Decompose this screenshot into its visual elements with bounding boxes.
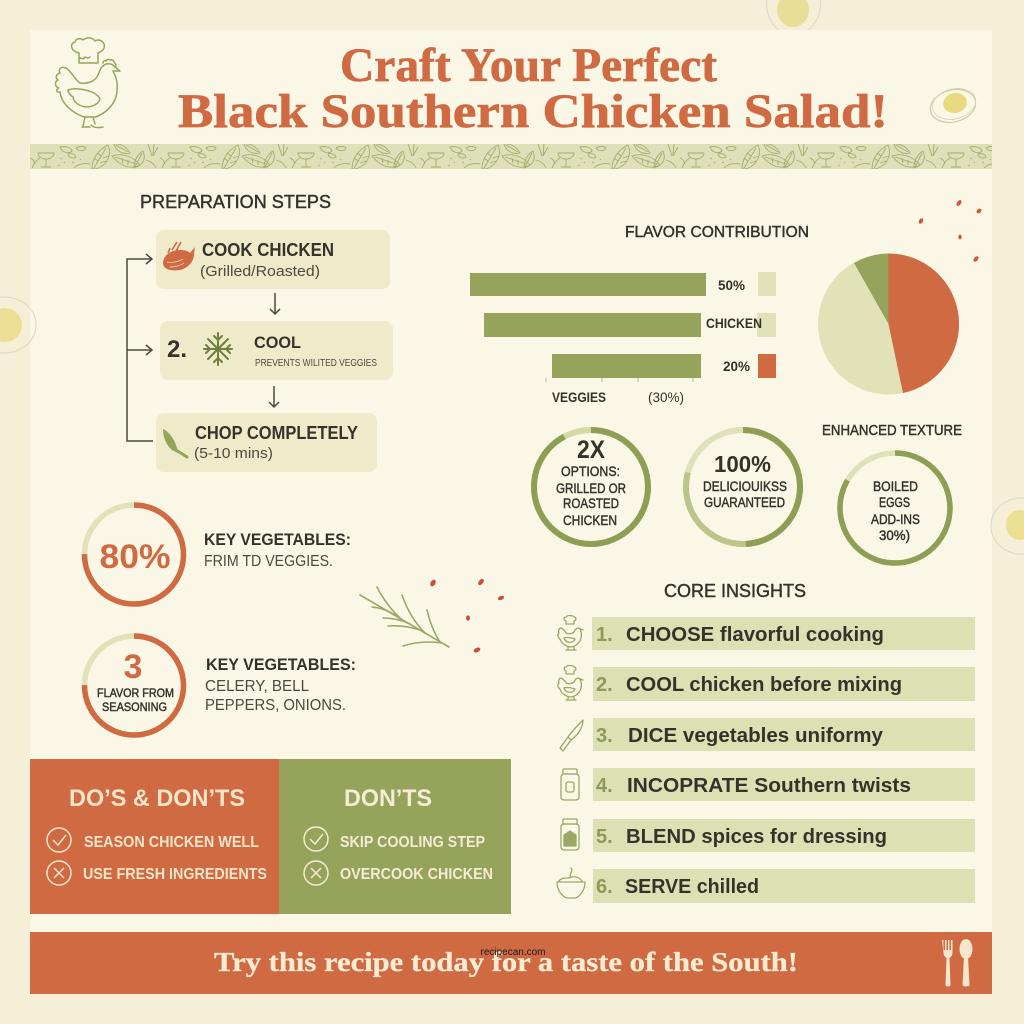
step 3: chop completely: (5-10 mins)	[194, 445, 273, 462]
footer banner: Try this recipe today for a taste of the South!	[214, 947, 798, 977]
icon: egg in header	[927, 84, 979, 127]
icon: check	[304, 827, 328, 851]
step 1: cook chicken: (Grilled/Roasted)	[200, 263, 320, 280]
title: Black Southern Chicken Salad!	[178, 85, 888, 138]
heading: preparation steps: PREPARATION STEPS	[140, 192, 331, 212]
icon: knife	[163, 429, 187, 457]
stat ring: 80%: 80%	[100, 538, 170, 576]
bar chart	[470, 272, 776, 405]
text: key vegetables 1: KEY VEGETABLES:	[204, 531, 351, 549]
step 1: cook chicken: COOK CHICKEN	[202, 240, 334, 260]
panel: don'ts: DON’TS	[344, 785, 432, 812]
step 2: cool: PREVENTS WILITED VEGGIES	[255, 358, 377, 369]
panel: don'ts: OVERCOOK CHICKEN	[340, 866, 493, 883]
flow connector arrows	[127, 254, 280, 441]
footer banner	[30, 932, 992, 994]
insight 2: 2.	[596, 674, 613, 696]
insight 5: 5.	[596, 826, 613, 848]
panel: do's and don'ts: USE FRESH INGREDIENTS	[83, 866, 267, 883]
bar chart: CHICKEN	[706, 316, 762, 331]
step 2: cool	[160, 321, 393, 380]
insight 3	[560, 718, 975, 751]
decorative egg: top right	[766, 0, 820, 35]
stat ring: boiled eggs	[840, 453, 950, 563]
icon: chicken outline	[558, 616, 583, 650]
text: key vegetables 2: CELERY, BELL	[205, 678, 309, 695]
stat ring: 3 flavor: SEASONING	[102, 700, 167, 714]
insight 2	[558, 666, 975, 701]
stat ring: 3 flavor: 3	[124, 648, 142, 686]
step 2: cool: COOL	[254, 333, 301, 352]
heading: flavor contribution: FLAVOR CONTRIBUTION	[625, 224, 809, 241]
decorative egg: left edge	[0, 297, 36, 353]
stat ring: 2X options: CHICKEN	[563, 512, 617, 528]
icon: fork and spoon	[942, 939, 972, 986]
stat ring: boiled eggs: ADD-INS	[871, 512, 920, 527]
stat ring: 3 flavor	[84, 636, 184, 735]
icon: chicken outline	[558, 666, 583, 700]
icon: chicken with chef hat	[55, 38, 120, 128]
stat ring: 2X options: 2X	[577, 436, 605, 464]
insight 1: 1.	[596, 624, 613, 646]
step 2: cool: 2.	[167, 336, 187, 363]
insight 6: SERVE chilled	[625, 876, 759, 898]
icon: rosemary sprig	[360, 587, 449, 647]
step 1: cook chicken	[156, 230, 390, 289]
pie chart	[818, 253, 959, 394]
insight 3: DICE vegetables uniformy	[628, 725, 884, 747]
insight 4: 4.	[596, 775, 613, 797]
icon: jar outline	[561, 769, 579, 800]
stat ring: 80%	[84, 505, 184, 604]
stat ring: boiled eggs: BOILED	[873, 479, 918, 494]
red pepper flakes: left	[429, 578, 505, 654]
stat ring: 2X options: OPTIONS:	[561, 463, 620, 479]
stat ring: 100%: 100%	[714, 451, 771, 477]
panel: don'ts: SKIP COOLING STEP	[340, 834, 485, 851]
panel: do's and don'ts: SEASON CHICKEN WELL	[84, 834, 259, 851]
icon: bowl	[557, 868, 585, 898]
icon: cross	[47, 861, 71, 885]
stat ring: 2X options: GRILLED OR	[556, 480, 626, 496]
text: key vegetables 1	[204, 531, 351, 570]
insight 4: INCOPRATE Southern twists	[627, 775, 911, 797]
bar chart: (30%)	[648, 390, 684, 405]
decorative egg: right edge	[991, 498, 1024, 554]
text: key vegetables 2	[205, 656, 356, 714]
stat ring: 100%	[686, 430, 800, 544]
insight 3: 3.	[596, 725, 613, 747]
icon: knife outline	[560, 720, 583, 751]
bar chart: 20%	[723, 359, 750, 374]
step 3: chop completely: CHOP COMPLETELY	[195, 423, 358, 443]
stat ring: boiled eggs: 30%)	[879, 528, 910, 543]
title	[178, 39, 888, 138]
bar chart: VEGGIES	[552, 390, 606, 405]
text: key vegetables 2: PEPPERS, ONIONS.	[205, 697, 346, 714]
title: Craft Your Perfect	[340, 39, 717, 92]
watermark: recipecan.com	[480, 947, 546, 958]
text: key vegetables 1: FRIM TD VEGGIES.	[204, 553, 333, 570]
heading: enhanced texture: ENHANCED TEXTURE	[822, 423, 962, 439]
icon: spice jar	[561, 819, 579, 850]
bar chart: 50%	[718, 278, 745, 293]
insight 5	[561, 819, 975, 852]
stat ring: 2X options	[534, 430, 648, 544]
icon: cross	[304, 861, 328, 885]
insight 2: COOL chicken before mixing	[626, 674, 902, 696]
icon: roast chicken	[163, 242, 195, 270]
stat ring: 100%: DELICIOUIKSS	[703, 479, 787, 494]
stat ring: 3 flavor: FLAVOR FROM	[97, 686, 174, 700]
panel: do's and don'ts: DO’S & DON’TS	[69, 785, 245, 812]
insight 6: 6.	[596, 876, 613, 898]
stat ring: 2X options: ROASTED	[563, 495, 619, 511]
panel: don'ts	[279, 759, 511, 914]
text: key vegetables 2: KEY VEGETABLES:	[206, 656, 356, 674]
red pepper flakes: right	[918, 199, 982, 263]
insight 1: CHOOSE flavorful cooking	[626, 624, 884, 646]
panel: do's and don'ts	[30, 759, 279, 914]
icon: check	[47, 828, 71, 852]
heading: core insights: CORE INSIGHTS	[664, 581, 806, 601]
decorative leaf band	[30, 144, 992, 169]
insight 5: BLEND spices for dressing	[626, 826, 887, 848]
insight 1	[558, 616, 975, 650]
insight 6	[557, 868, 975, 903]
insight 4	[561, 768, 975, 801]
stat ring: 100%: GUARANTEED	[704, 495, 785, 510]
stat ring: boiled eggs: EGGS	[879, 495, 910, 510]
step 3: chop completely	[156, 413, 377, 472]
icon: snowflake	[204, 333, 232, 365]
